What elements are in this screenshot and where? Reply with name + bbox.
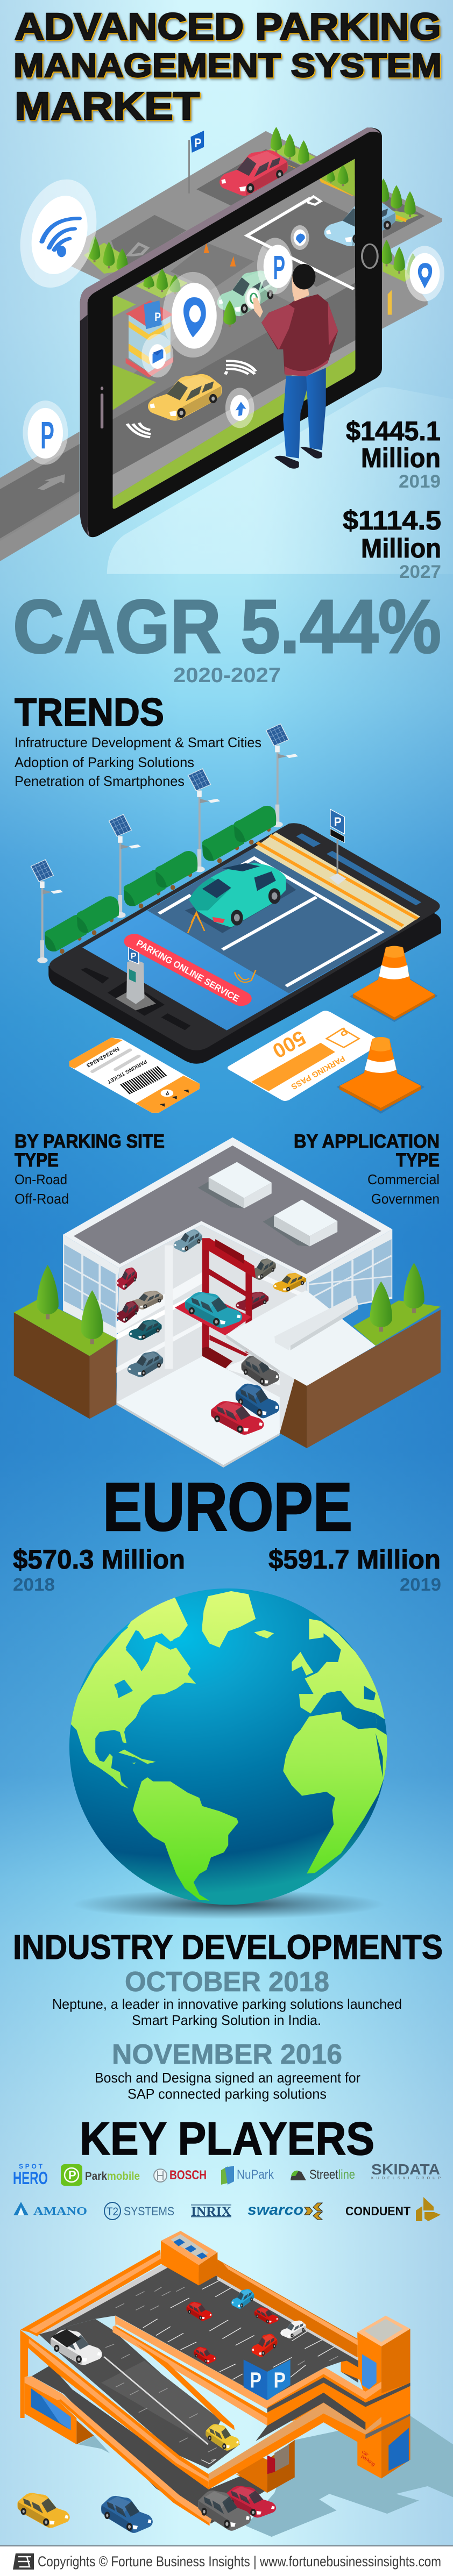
car parking wall text: parking [360, 2453, 376, 2467]
logo: Swarco [247, 2201, 322, 2220]
parking pass card [228, 1011, 377, 1101]
Europe 2019 value: 2019 [400, 1575, 441, 1594]
logo: T2 Systems: T2 [107, 2206, 118, 2218]
trends list: Penetration of Smartphones [15, 773, 185, 789]
parking kiosk: P [154, 310, 161, 324]
P bubble: P [273, 249, 285, 287]
parking sign: P [194, 136, 201, 151]
traffic cone left [337, 1037, 424, 1114]
logo: Spot Hero: SPOT [19, 2163, 43, 2170]
development: October 2018: Smart Parking Solution in India. [132, 2012, 321, 2028]
segment list: application [367, 1171, 440, 1207]
development: October 2018: OCTOBER 2018 [125, 1966, 329, 1998]
ground shadow [78, 2416, 453, 2537]
market value 2019: $1445.1 [346, 416, 441, 446]
parking online service banner: PARKING ONLINE SERVICE [135, 938, 241, 1004]
wifi bubble [11, 176, 105, 291]
parking meter [116, 948, 156, 1011]
trends list: Infratructure Development & Smart Cities [15, 734, 261, 750]
phone screen [82, 832, 420, 1031]
parking meter: P [131, 951, 136, 961]
street level cars [17, 2486, 276, 2533]
parking pass card: PARKING PASS [289, 1054, 346, 1091]
interior [116, 1225, 309, 1468]
parking ticket: P [164, 1090, 170, 1097]
Europe 2018 value: $570.3 Million [13, 1544, 185, 1575]
P bubble on road: P [40, 414, 54, 457]
parking ticket [69, 1037, 200, 1113]
logo: Conduent: CONDUENT [345, 2204, 410, 2218]
market value 2027: 2027 [399, 562, 441, 582]
small pin bubble [291, 225, 309, 250]
logo: Swarco: swarco [247, 2201, 303, 2218]
left ramp rim [20, 2330, 209, 2489]
segment list: application: Commercial [367, 1171, 440, 1187]
logo: NuPark [221, 2166, 274, 2185]
parking sign [188, 131, 204, 194]
teal sports car [185, 863, 296, 933]
logo: Streetline [291, 2167, 355, 2182]
segment heading: by application type [294, 1131, 440, 1171]
pin bubble right [405, 246, 444, 302]
logo: Bosch: BOSCH [169, 2168, 207, 2183]
car parking wall text: car [361, 2449, 370, 2457]
logo: Amano [13, 2202, 87, 2217]
P cube sign: P [250, 2368, 261, 2393]
development: November 2016: Bosch and Designa signed an agreement for [95, 2070, 360, 2086]
central pillar [236, 2440, 295, 2493]
person [246, 264, 338, 469]
red car lift [175, 1238, 256, 1368]
P cube sign [244, 2359, 291, 2400]
logo: Spot Hero [13, 2163, 48, 2188]
green hedges [45, 806, 276, 954]
logo: Parkmobile [61, 2164, 140, 2186]
logo: Amano: AMANO [33, 2205, 87, 2217]
entrance forecourt and canopy [226, 1290, 376, 1386]
Europe 2019 value [268, 1544, 441, 1594]
logo: T2 Systems [104, 2202, 174, 2220]
small deck cars [186, 2289, 306, 2364]
trees behind tablet [89, 127, 419, 279]
title: MARKET [15, 85, 200, 128]
trends list [15, 734, 261, 789]
glass facades [63, 1229, 392, 1339]
tablet screen map [113, 159, 355, 509]
traffic cone right [350, 946, 438, 1022]
Europe 2019 value: $591.7 Million [268, 1544, 441, 1575]
white pickup and yellow van [51, 2329, 239, 2451]
segment heading: by application type: TYPE [396, 1150, 440, 1171]
ground floor cars [211, 1356, 279, 1435]
illustration: globe [67, 1588, 388, 1919]
red car [220, 150, 288, 196]
logo: Streetline: Streetline [309, 2167, 355, 2182]
P cube sign: P [274, 2368, 286, 2393]
development: November 2016: SAP connected parking solutions [128, 2086, 327, 2102]
wifi signal arcs on road [127, 361, 256, 437]
logo: Skidata: KUDELSKI GROUP [371, 2177, 441, 2180]
rooftop rims [20, 2250, 358, 2357]
illustration: tablet with smart parking app [0, 127, 453, 574]
parking pass card: 500 [268, 1026, 309, 1062]
main ramp [39, 2319, 240, 2468]
title [13, 5, 442, 128]
centre divider [112, 2316, 267, 2430]
segment heading: by parking site type: BY PARKING SITE [15, 1131, 165, 1152]
logo: Spot Hero: HERO [13, 2168, 48, 2188]
parking ticket: PARKING TICKET [106, 1058, 148, 1085]
parked cars on levels [117, 1229, 306, 1377]
logo: Conduent [345, 2197, 441, 2221]
market value 2027: $1114.5 [343, 505, 441, 535]
arrow bubble [225, 388, 254, 428]
right ground block [280, 1300, 441, 1448]
phone body [48, 823, 441, 1064]
segment list: parking site [15, 1171, 69, 1207]
development: November 2016 [95, 2039, 360, 2102]
segment heading: by application type: BY APPLICATION [294, 1131, 440, 1152]
footer [0, 2545, 453, 2576]
development: November 2016: NOVEMBER 2016 [112, 2039, 342, 2070]
illustration: phone as parking lot [31, 724, 441, 1114]
mail bubble [141, 334, 173, 377]
roof [63, 1137, 392, 1278]
segment list: parking site: Off-Road [15, 1191, 69, 1207]
logo: Parkmobile: Parkmobile [85, 2170, 140, 2183]
market value 2019 [346, 416, 441, 492]
tablet frame [80, 127, 382, 537]
market value 2019: Million [361, 443, 441, 473]
development: October 2018 [52, 1966, 402, 2028]
trends list: Adoption of Parking Solutions [15, 754, 194, 770]
logo: NuPark: NuPark [237, 2167, 274, 2182]
P street sign: P [334, 815, 342, 829]
illustration: orange parking garage [17, 2231, 453, 2537]
segment heading: by parking site type [15, 1131, 165, 1171]
parking pass card: P [337, 1025, 349, 1039]
continents [67, 1591, 388, 1901]
seas cut into land [114, 1631, 383, 1777]
logo: T2 Systems: SYSTEMS [124, 2205, 174, 2218]
logo: Bosch [154, 2168, 207, 2183]
market value 2019: 2019 [399, 471, 441, 492]
lift tower [357, 2316, 410, 2479]
P bubble [257, 238, 293, 294]
logo: INRIX: INRIX [191, 2205, 231, 2219]
lower left wall [20, 2330, 94, 2444]
upper deck tiers [208, 2367, 410, 2489]
blue car behind frame [324, 202, 396, 246]
market value 2027 [343, 505, 441, 582]
CAGR period: 2020-2027 [173, 664, 281, 687]
parking lot behind tablet [0, 131, 442, 561]
market value 2027: Million [361, 533, 441, 563]
P bubble on road [23, 400, 68, 465]
left ground block [14, 1299, 116, 1419]
region heading: EUROPE [103, 1469, 352, 1545]
big pin bubble [162, 272, 223, 357]
trends heading: TRENDS [15, 691, 164, 734]
segment list: parking site: On-Road [15, 1171, 67, 1187]
parking kiosk [126, 300, 173, 377]
roof deck [39, 2264, 362, 2399]
Europe 2018 value [13, 1544, 185, 1594]
logo: Parkmobile: P [68, 2169, 76, 2182]
orange parking lock [235, 970, 256, 982]
Europe 2018 value: 2018 [13, 1575, 55, 1594]
cypress trees [37, 1263, 424, 1344]
lower ramp [25, 2365, 266, 2526]
segment list: application: Governmen [371, 1191, 440, 1207]
illustration: multi-storey car park building [14, 1137, 441, 1468]
development: October 2018: Neptune, a leader in innovative parking solutions launched [52, 1996, 402, 2012]
P street sign [329, 809, 346, 885]
title: ADVANCED PARKING [15, 5, 441, 47]
roof tower with skylights [161, 2231, 217, 2286]
footer logo [13, 2553, 34, 2570]
title: MANAGEMENT SYSTEM [13, 47, 442, 84]
logo: Skidata: SKIDATA [371, 2161, 440, 2178]
solar street lamps [31, 724, 298, 963]
key players heading: KEY PLAYERS [80, 2113, 374, 2165]
segment heading: by parking site type: TYPE [15, 1150, 59, 1171]
parking ticket: №23424343 [85, 1046, 120, 1069]
